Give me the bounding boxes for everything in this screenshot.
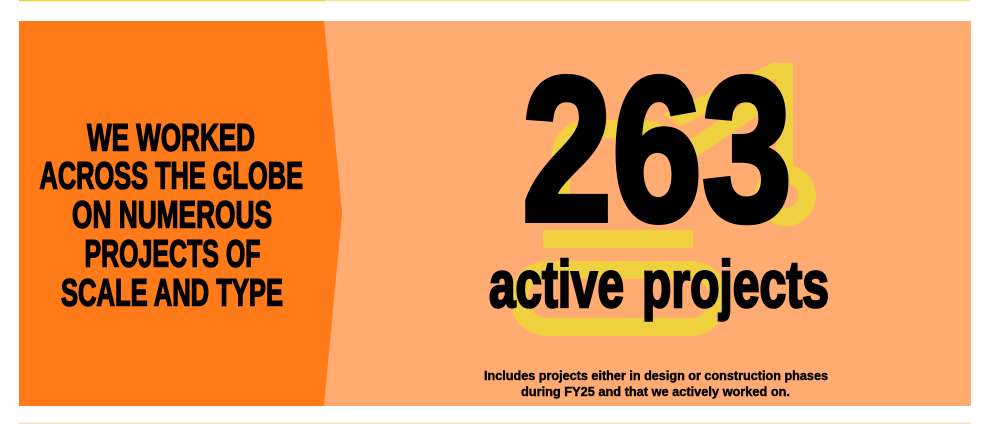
footnote [484, 369, 828, 399]
bottom divider [19, 423, 971, 424]
footnote: during FY25 and that we actively worked on. [521, 385, 790, 399]
label: active projects: active [489, 247, 624, 321]
heading: ON NUMEROUS [72, 194, 272, 236]
label: active projects [489, 247, 829, 321]
panel: orange arrow [19, 21, 342, 406]
heading: WE WORKED [87, 118, 255, 160]
top divider [19, 0, 971, 1]
label: active projects: projects [642, 247, 829, 321]
heading [40, 118, 303, 314]
heading: SCALE AND TYPE [61, 272, 283, 314]
footnote: Includes projects either in design or construction phases [484, 369, 828, 383]
heading: ACROSS THE GLOBE [40, 156, 303, 198]
big number: 263 [522, 35, 792, 264]
icon: yellow route with arrow [519, 63, 807, 327]
heading: PROJECTS OF [84, 234, 260, 276]
